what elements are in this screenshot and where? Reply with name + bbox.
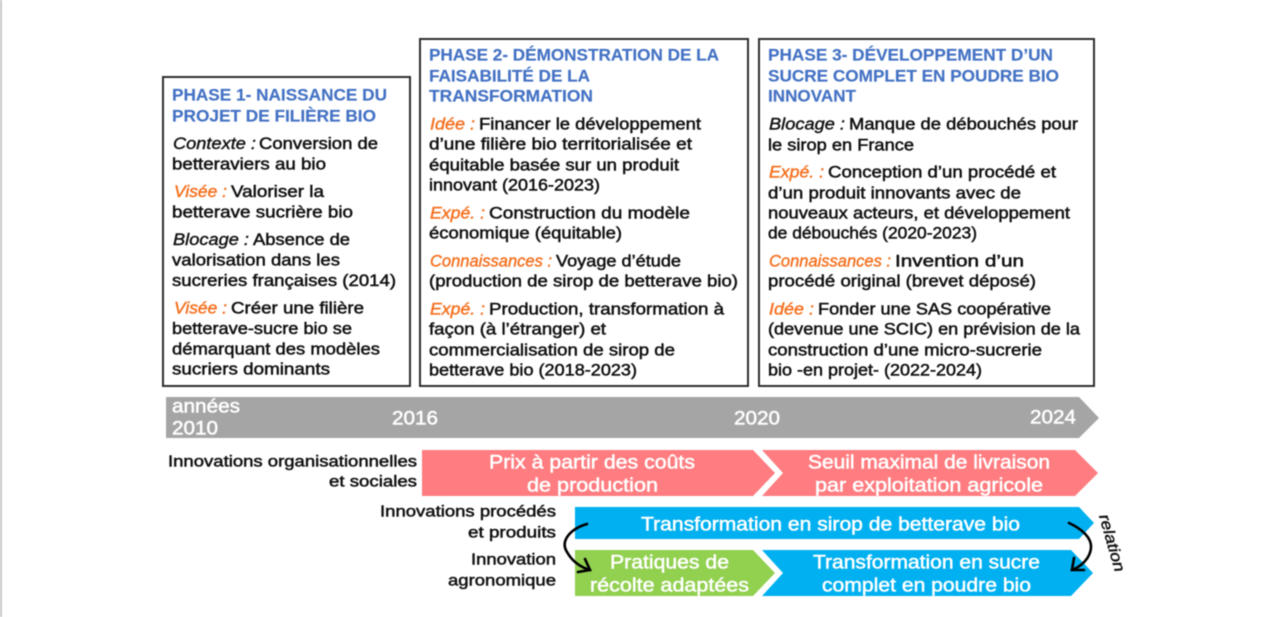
arrow: prix à partir des coûts: de production	[527, 476, 658, 496]
phase 3 text: Blocage :	[769, 116, 845, 134]
arrow: prix à partir des coûts	[422, 450, 775, 496]
phase 3 text: procédé original (brevet déposé)	[768, 272, 1036, 290]
curved arrow: left relation	[565, 524, 590, 572]
arrow: prix à partir des coûts: Prix à partir des coûts	[489, 452, 695, 474]
phase 1 text: Créer une filière	[231, 300, 364, 318]
phase 1 text: Contexte :	[173, 135, 256, 153]
phase 3 text: le sirop en France	[768, 136, 914, 154]
phase 3 text: Expé. :	[769, 164, 824, 182]
row label: innovations procédés et produits: et produits	[468, 524, 556, 542]
phase 1 text: Visée :	[174, 183, 227, 201]
phase 3 text: Idée :	[769, 300, 814, 318]
phase 1 text: sucreries françaises (2014)	[172, 272, 396, 290]
phase 2 text: innovant (2016-2023)	[429, 176, 600, 194]
phase 1 heading	[172, 86, 387, 126]
row label: innovation agronomique	[448, 552, 556, 590]
phase 2 text: Connaissances :	[430, 252, 552, 270]
phase 3 text	[768, 116, 1081, 380]
phase 3 text: Conception d’un procédé et	[828, 164, 1056, 182]
phase 2 text: betterave bio (2018-2023)	[429, 362, 637, 380]
phase 2 heading: TRANSFORMATION	[429, 88, 593, 106]
phase 1 text: démarquant des modèles	[172, 340, 380, 358]
phase 1 text: sucriers dominants	[172, 360, 330, 378]
arrow: pratiques de récolte: Pratiques de	[610, 552, 729, 574]
arrow: transformation en sirop: Transformation en sirop de betterave bio	[641, 514, 1020, 536]
phase 1 text	[172, 135, 396, 378]
phase 3 text: Connaissances :	[769, 252, 891, 270]
arrow: transformation en sucre	[762, 550, 1093, 596]
arrow: transformation en sirop	[575, 507, 1094, 539]
arrow: seuil maximal de livraison: Seuil maximal de livraison	[808, 452, 1050, 474]
phase 3 text: Manque de débouchés pour	[849, 116, 1079, 134]
arrow: pratiques de récolte	[575, 550, 775, 596]
arrow: pratiques de récolte: récolte adaptées	[590, 576, 749, 596]
phase 1 text: betteraviers au bio	[172, 156, 326, 174]
timeline arrow: 2010	[172, 418, 218, 440]
phase 1 text: betterave-sucre bio se	[172, 320, 352, 338]
row label: innovations organisationnelles: Innovations organisationnelles	[168, 454, 417, 470]
phase 2 text: Financer le développement	[479, 116, 701, 134]
phase 3 heading: INNOVANT	[768, 88, 856, 106]
phase 2 text: Voyage d’étude	[556, 252, 681, 270]
row label: innovations procédés et produits	[380, 504, 556, 542]
row label: innovation agronomique: agronomique	[448, 572, 556, 590]
phase 3 text: Fonder une SAS coopérative	[818, 300, 1051, 318]
timeline arrow: 2024	[1030, 408, 1076, 428]
row label: innovations organisationnelles	[168, 454, 417, 490]
timeline arrow: 2020	[734, 408, 780, 430]
phase 2 heading: FAISABILITÉ DE LA	[429, 66, 590, 86]
phase 3 heading: SUCRE COMPLET EN POUDRE BIO	[768, 68, 1059, 86]
phase 1 heading: PHASE 1- NAISSANCE DU	[172, 86, 387, 104]
phase 2 text: Expé. :	[430, 300, 485, 318]
phase 3 text: Invention d’un	[895, 252, 1024, 270]
row label: innovation agronomique: Innovation	[471, 552, 556, 568]
arrow: seuil maximal de livraison: par exploitation agricole	[815, 476, 1043, 496]
phase 1 text: betterave sucrière bio	[172, 204, 353, 222]
phase 3 text: (devenue une SCIC) en prévision de la	[768, 320, 1081, 338]
phase 1 text: Visée :	[174, 300, 227, 318]
phase 2 text: façon (à l’étranger) et	[429, 320, 606, 338]
phase 2 heading: PHASE 2- DÉMONSTRATION DE LA	[429, 46, 719, 64]
label: relation: relation	[1095, 512, 1128, 574]
arrow: transformation en sucre: complet en poudre bio	[822, 576, 1031, 596]
phase 3 heading	[768, 46, 1059, 106]
phase 2 text	[429, 116, 738, 380]
arrow: transformation en sucre: Transformation en sucre	[813, 552, 1040, 574]
phase 3 text: d’un produit innovants avec de	[768, 184, 1021, 202]
phase 3 text: de débouchés (2020-2023)	[768, 224, 977, 242]
phase 2 text: Idée :	[430, 116, 475, 134]
phase 3 text: construction d’une micro-sucrerie	[768, 342, 1042, 360]
timeline arrow: années	[172, 396, 240, 418]
timeline arrow	[166, 396, 1099, 440]
phase 2 text: (production de sirop de betterave bio)	[429, 272, 738, 290]
phase 3 text: nouveaux acteurs, et développement	[768, 204, 1070, 222]
timeline arrow: 2016	[392, 408, 438, 430]
row label: innovations procédés et produits: Innovations procédés	[380, 504, 556, 520]
phase 2 heading	[429, 46, 719, 106]
row label: innovations organisationnelles: et sociales	[329, 474, 417, 490]
phase 1 text: Conversion de	[259, 135, 378, 153]
phase 1 text: Absence de	[253, 231, 350, 249]
phase 2 text: équitable basée sur un produit	[429, 156, 679, 174]
panel: phase 3	[759, 39, 1094, 386]
phase 1 text: valorisation dans les	[172, 252, 340, 270]
phase 1 text: Valoriser la	[231, 183, 325, 201]
arrow: seuil maximal de livraison	[762, 450, 1098, 496]
phase 1 heading: PROJET DE FILIÈRE BIO	[172, 106, 376, 126]
phase 2 text: Expé. :	[430, 204, 485, 222]
panel: phase 2	[420, 39, 748, 386]
phase 2 text: Construction du modèle	[489, 204, 690, 222]
panel: phase 1	[163, 77, 410, 386]
phase 2 text: d’une filière bio territorialisée et	[429, 136, 692, 154]
phase 3 text: bio -en projet- (2022-2024)	[768, 362, 982, 380]
phase 1 text: Blocage :	[173, 231, 249, 249]
curved arrow: right relation	[1069, 523, 1091, 570]
phase 2 text: Production, transformation à	[489, 300, 725, 318]
phase 3 heading: PHASE 3- DÉVELOPPEMENT D’UN	[768, 46, 1053, 64]
phase 2 text: économique (équitable)	[429, 224, 622, 242]
phase 2 text: commercialisation de sirop de	[429, 342, 675, 360]
